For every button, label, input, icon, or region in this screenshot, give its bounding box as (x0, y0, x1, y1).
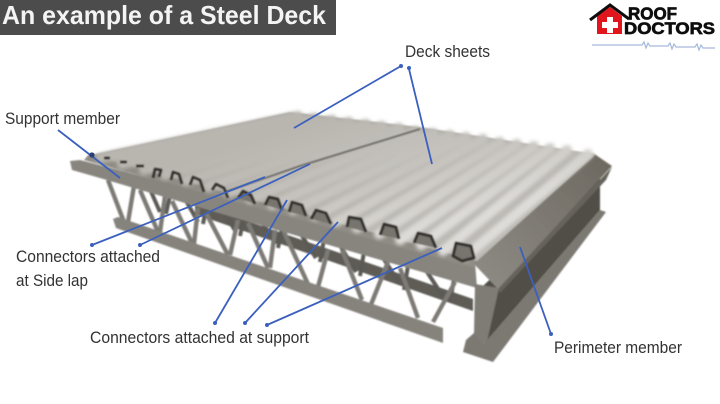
logo wordmark: DOCTORS (624, 19, 715, 38)
front truss: web members (108, 180, 455, 322)
logo heartbeat line (592, 42, 715, 50)
callout labels (5, 42, 682, 357)
arrows: deck sheets (294, 64, 432, 164)
support member: top chord (70, 160, 477, 288)
label: Deck sheets: Deck sheets (405, 42, 490, 61)
back truss: lower chord and webs (145, 178, 473, 311)
arrows: connectors at support (213, 200, 442, 327)
label: Connectors attached at Side lap (16, 247, 160, 290)
label: Perimeter member: Perimeter member (554, 338, 682, 357)
blue leader lines (58, 64, 553, 336)
deck sheets (90, 112, 596, 261)
title banner: An example of a Steel Deck (2, 0, 327, 30)
front truss: bottom chord (113, 217, 443, 343)
arrow: perimeter member (520, 247, 553, 336)
deck underlay between sheet ends and chord (84, 153, 475, 268)
arrow: support member (58, 130, 120, 178)
logo wordmark: ROOF (628, 4, 677, 24)
label: Connectors attached at Side lap: at Side lap (16, 271, 88, 290)
logo wordmark (624, 4, 715, 38)
logo: Roof Doctors (590, 4, 715, 50)
arrows: connectors at side lap (90, 164, 310, 247)
label: Connectors attached at support: Connectors attached at support (90, 328, 309, 347)
steel deck illustration (70, 112, 612, 362)
label: Support member: Support member (5, 109, 120, 128)
label: Connectors attached at Side lap: Connectors attached (16, 247, 160, 266)
side lap seam (225, 129, 420, 192)
corrugated deck end profiles (104, 158, 474, 261)
perimeter member: I-beam (463, 153, 612, 362)
icon: house with medical cross (590, 5, 629, 34)
